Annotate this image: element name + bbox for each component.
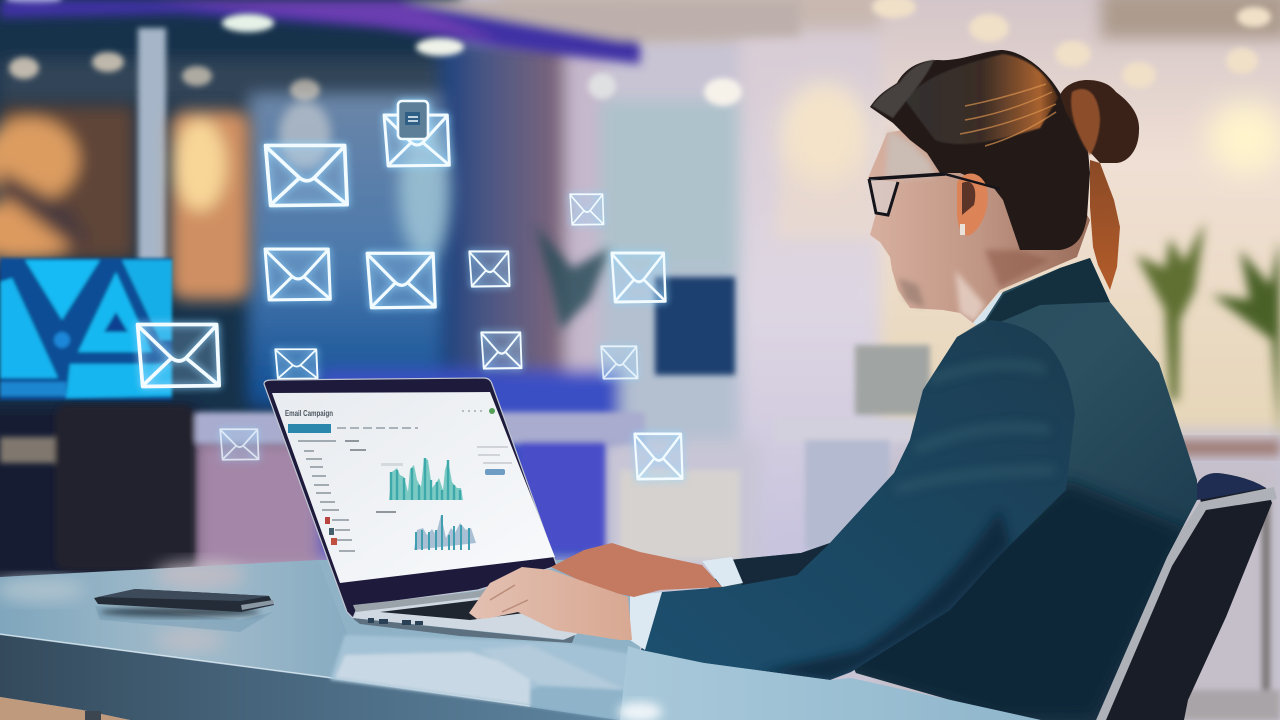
front hand bbox=[469, 567, 632, 640]
purple ceiling lights bbox=[222, 14, 464, 56]
glasses bbox=[869, 174, 1000, 215]
icon: envelope lower right bbox=[601, 346, 638, 379]
sidebar red markers bbox=[325, 517, 330, 524]
ear bbox=[957, 173, 988, 236]
jacket body bbox=[700, 258, 1197, 720]
chair bbox=[1096, 473, 1277, 720]
wall glows bbox=[279, 85, 1280, 260]
icon: envelope with letter bbox=[384, 101, 449, 166]
hair bbox=[870, 50, 1090, 250]
back forearm sleeve bbox=[729, 543, 830, 585]
blurred background furniture bbox=[0, 277, 1280, 720]
shirt cuffs bbox=[630, 592, 662, 650]
screen nav bbox=[337, 427, 418, 429]
lower bar chart bbox=[414, 515, 476, 550]
icon: envelope bottom right bbox=[634, 434, 682, 479]
icon: envelope faint left bbox=[220, 429, 259, 460]
laptop lid bbox=[264, 378, 557, 618]
sidebar list bbox=[298, 441, 355, 551]
purple ceiling strip bbox=[0, 0, 800, 64]
phone on desk bbox=[94, 589, 274, 632]
laptop reflection on desk bbox=[330, 635, 640, 720]
floating envelope icons bbox=[138, 101, 683, 479]
blue neon sign bbox=[0, 258, 172, 400]
icon: envelope above laptop bbox=[275, 349, 318, 379]
jacket collar bbox=[982, 258, 1110, 328]
icon: envelope centre right bbox=[469, 251, 510, 287]
ponytail bbox=[1090, 160, 1120, 290]
status dot bbox=[489, 408, 495, 414]
person bbox=[469, 50, 1277, 720]
panel labels bbox=[345, 441, 396, 512]
back hand bbox=[551, 543, 722, 597]
side button bbox=[485, 469, 505, 475]
orange glowing panel bbox=[170, 110, 250, 300]
icon: envelope lower middle bbox=[481, 332, 522, 369]
icon: envelope right bbox=[612, 253, 665, 302]
pillar bbox=[138, 28, 166, 263]
screen title: Email Campaign bbox=[285, 409, 333, 418]
hair bun bbox=[1060, 80, 1139, 163]
icon: envelope large top left bbox=[266, 145, 347, 206]
upper bar chart bbox=[389, 458, 463, 500]
icon: envelope large left bbox=[138, 325, 219, 386]
laptop screen bbox=[272, 392, 555, 583]
shirt collar bbox=[973, 292, 1006, 330]
desk bbox=[0, 560, 1041, 720]
wall art panel bbox=[0, 105, 135, 260]
laptop bbox=[264, 378, 590, 643]
neck and face bbox=[868, 110, 1090, 323]
jacket lower dark bbox=[840, 480, 1190, 720]
icon: envelope centre bbox=[367, 253, 435, 308]
laptop base bbox=[347, 595, 590, 643]
blurred ceiling lights bbox=[6, 0, 1271, 106]
icon: envelope small upper middle bbox=[570, 194, 604, 225]
sleeve bbox=[641, 320, 1075, 680]
desk foreground right of the arm bbox=[618, 646, 1041, 720]
icon: envelope mid left bbox=[265, 249, 330, 300]
background plants bbox=[535, 222, 1280, 440]
